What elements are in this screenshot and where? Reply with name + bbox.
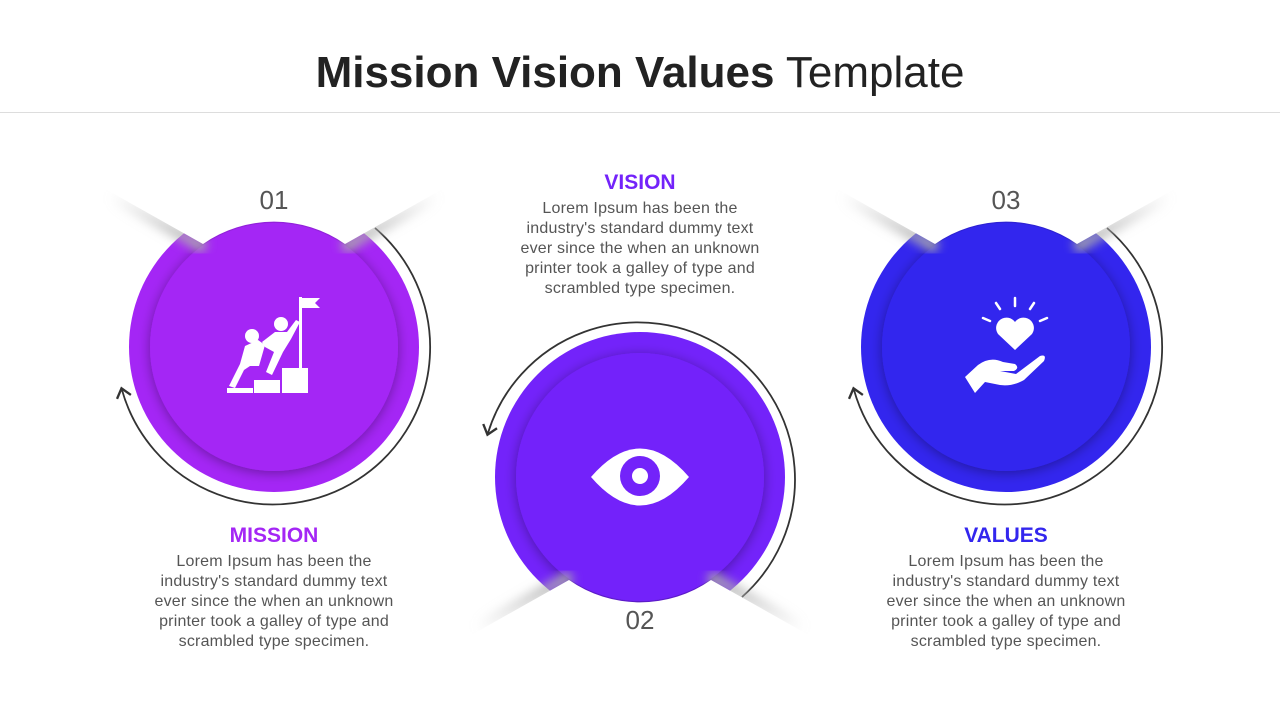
circle: mission bbox=[100, 186, 448, 504]
text: vision: industry's standard dummy text bbox=[527, 220, 753, 237]
text: vision: Lorem Ipsum has been the bbox=[542, 200, 738, 217]
icon: climbers bbox=[227, 297, 320, 393]
text: mission: MISSION bbox=[230, 524, 318, 547]
text: mission: industry's standard dummy text bbox=[161, 573, 387, 590]
circle: vision bbox=[466, 322, 814, 638]
number 02: 02 bbox=[626, 605, 654, 635]
number 03: 03 bbox=[992, 185, 1020, 215]
text: vision: VISION bbox=[604, 171, 676, 194]
text: values: industry's standard dummy text bbox=[893, 573, 1119, 590]
text: vision bbox=[520, 171, 760, 297]
text: vision: scrambled type specimen. bbox=[545, 280, 735, 297]
title: Mission Vision Values Template bbox=[316, 48, 964, 97]
text: values: VALUES bbox=[964, 524, 1048, 547]
text: mission bbox=[154, 524, 394, 650]
text: values: Lorem Ipsum has been the bbox=[908, 553, 1104, 570]
circle: values bbox=[832, 186, 1180, 504]
text: mission: scrambled type specimen. bbox=[179, 633, 369, 650]
text: values: printer took a galley of type and bbox=[891, 613, 1121, 630]
text: mission: ever since the when an unknown bbox=[154, 593, 394, 610]
text: values bbox=[886, 524, 1126, 650]
number 01: 01 bbox=[260, 185, 288, 215]
text: mission: Lorem Ipsum has been the bbox=[176, 553, 372, 570]
text: vision: printer took a galley of type and bbox=[525, 260, 755, 277]
text: vision: ever since the when an unknown bbox=[520, 240, 760, 257]
icon: heart in hand bbox=[965, 298, 1047, 393]
text: values: ever since the when an unknown bbox=[886, 593, 1126, 610]
text: mission: printer took a galley of type and bbox=[159, 613, 389, 630]
text: values: scrambled type specimen. bbox=[911, 633, 1101, 650]
icon: eye bbox=[591, 448, 689, 506]
